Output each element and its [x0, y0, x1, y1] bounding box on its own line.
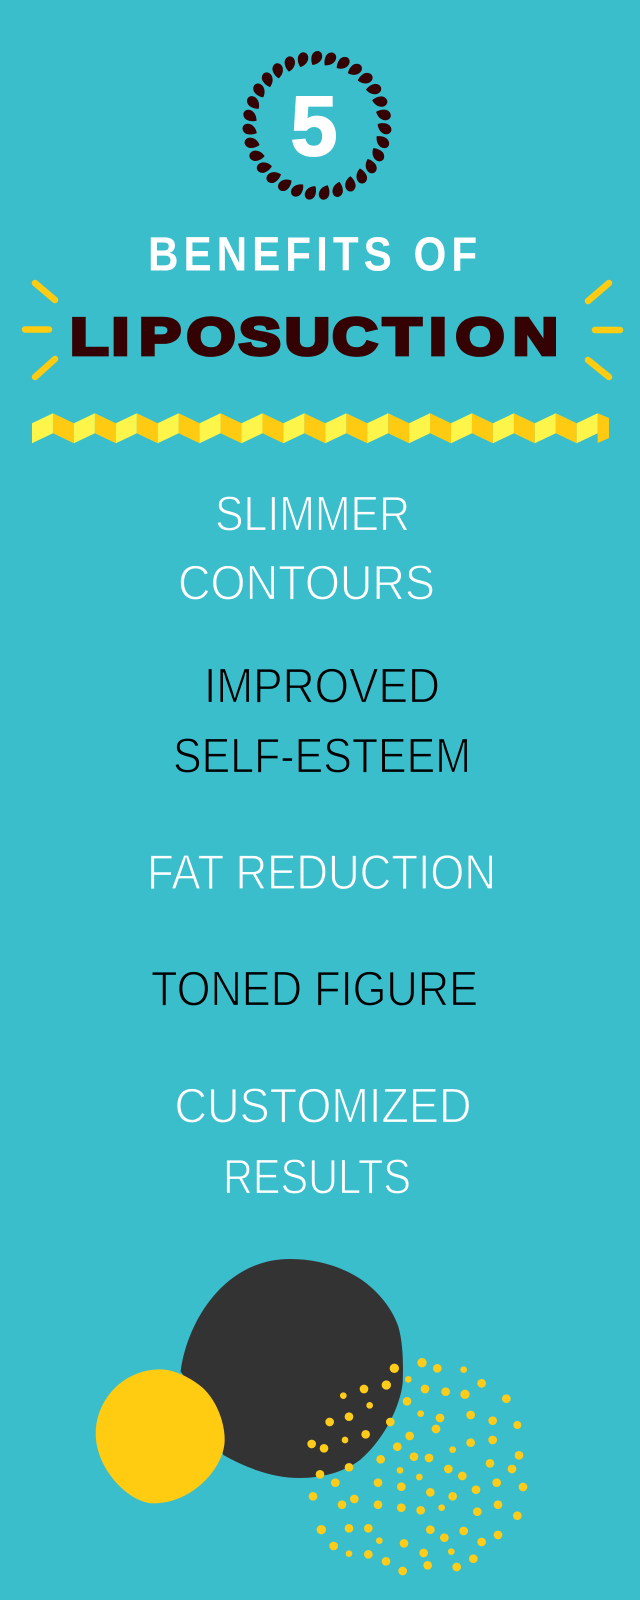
heading: benefits of: BENEFITS OF	[148, 227, 477, 281]
benefit 2: improved self-esteem: SELF-ESTEEM	[173, 730, 471, 784]
zigzag ribbon	[32, 413, 609, 443]
benefit 1: slimmer contours: SLIMMER	[215, 488, 410, 542]
benefit 1: slimmer contours	[178, 488, 435, 610]
decoration: blobs and dots	[96, 1259, 527, 1575]
heading: liposuction: LIPOSUCTION	[70, 308, 558, 366]
benefit 3: fat reduction: FAT REDUCTION	[147, 846, 496, 900]
benefit 5: customized results: CUSTOMIZED	[174, 1080, 472, 1134]
yellow blob	[96, 1369, 225, 1503]
dark blob	[181, 1259, 403, 1478]
scattered dots	[307, 1358, 527, 1575]
benefit 5: customized results	[174, 1080, 472, 1204]
numeral 5: 5	[291, 79, 337, 173]
icon: right rays	[588, 283, 620, 377]
benefit 2: improved self-esteem	[173, 660, 471, 784]
benefit 5: customized results: RESULTS	[223, 1150, 411, 1204]
icon: left rays	[25, 283, 55, 377]
icon: ring of drops	[242, 51, 392, 200]
benefit 1: slimmer contours: CONTOURS	[178, 556, 435, 610]
benefit 2: improved self-esteem: IMPROVED	[204, 660, 440, 714]
benefit 4: toned figure: TONED FIGURE	[151, 962, 478, 1016]
